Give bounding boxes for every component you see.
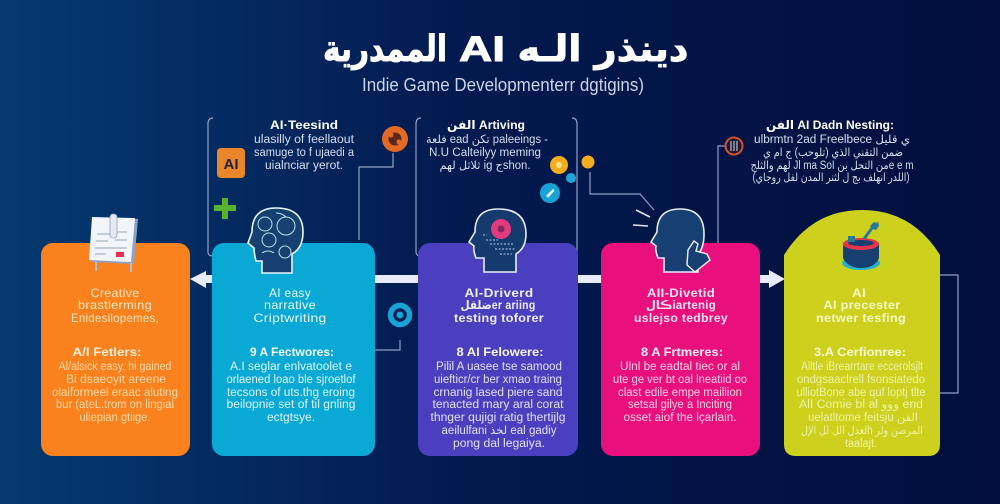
subtitle: Indie Game Developmenterr dgtigins)	[362, 75, 644, 95]
text: orange card body: Al/alsick easy. hi gained	[58, 361, 172, 373]
text: art description: N.U Calteilyy meming	[429, 147, 541, 159]
text: data nesting description: ضمن التقني الذي (تلوحب) ج ام ي	[763, 147, 903, 160]
heading: purple card: AI-Driverd	[464, 286, 534, 300]
icon: dark red ring	[726, 138, 742, 154]
icon: pink card head and thumb	[651, 209, 710, 272]
icon: token circles	[540, 156, 594, 203]
heading: art: الفن Artiving	[447, 118, 525, 132]
heading: purple card	[454, 286, 544, 325]
text: teal card body: tecsons of uts.thg eroing	[227, 387, 355, 399]
text: purple card body: pong dal legaiya.	[453, 438, 545, 450]
heading: orange card: Enidesilopemes,	[71, 311, 159, 325]
text: purple card body: aeilulfani لخذ eal gadiy	[442, 425, 557, 437]
text: AI tool description: uialnciar yerot.	[265, 160, 343, 172]
callout: AI data nesting note	[718, 118, 914, 244]
heading: data nesting: الفن AI Dadn Nesting:	[766, 118, 894, 132]
text: teal card body: beilopnie set of til gnling	[226, 399, 356, 411]
heading: orange card: Creative	[90, 286, 140, 300]
heading: orange card: brastlerming	[78, 298, 152, 312]
panel: pink AI-driven marketing	[601, 243, 760, 456]
heading: teal card	[254, 286, 326, 325]
icon: green plus	[214, 198, 236, 219]
text: data nesting description: لهم والثلج Jl ma Soمن التحل بن اe e m	[750, 160, 914, 173]
text: art description	[426, 134, 548, 172]
icon: notebook	[89, 214, 138, 272]
icon: cake machine	[842, 221, 880, 270]
connector: token to pink head	[590, 172, 654, 226]
text: data nesting description: ulbrmtn 2ad Freelbece ي قليل	[754, 134, 910, 146]
text: AI tool description: samuge to f ujaedi a	[254, 147, 355, 159]
heading: pink card: AII-Divetid	[647, 286, 715, 300]
text: pink card body: Ulnl be eadtal tiec or al	[620, 361, 740, 373]
text: art description: ثلاثل لهم ig جshon.	[440, 160, 530, 172]
heading: purple card: testing toforer	[454, 311, 544, 325]
text: data nesting description	[750, 134, 914, 185]
connector: gear to purple card	[375, 340, 400, 350]
heading: pink card: uslejso tedbrey	[634, 311, 728, 325]
text: orange card body: uliepian gtiige.	[80, 412, 150, 424]
text: teal card body: ectgtsye.	[267, 412, 315, 424]
text: lime card body: ulliotBone abe quf loptj tlte	[796, 387, 926, 399]
text: pink card body: ute ge ver bt oal lneatiid oo	[613, 374, 747, 386]
heading: teal card: AI easy	[269, 286, 311, 300]
text: pink card body	[613, 361, 747, 424]
heading: AI tool: AI·Teesind	[270, 118, 338, 132]
text: lime card body: لغذل الل لل الإلh المرصن ولر	[801, 425, 923, 438]
text: orange card body: Bi dsaeoyit areene	[66, 374, 166, 386]
icon: AI badge	[217, 148, 245, 178]
title: AI	[459, 30, 505, 69]
text: lime card body: uelatltome feitsju الفن	[808, 412, 918, 425]
text: purple card body: Pilil A uasee tse samood	[436, 361, 562, 373]
text: lime card body: Alltle iBrearrtare eccerolsjlt	[801, 361, 924, 373]
title	[323, 29, 688, 70]
text: teal card body: A.I seglar enlvatoolet e	[230, 361, 352, 373]
panel: lime AI precester testing	[784, 210, 940, 456]
text: purple card body: crnanig lased piere sand	[434, 387, 562, 399]
text: pink card body: clast edile empe maillion	[618, 387, 742, 399]
text: purple card body: uiefticr/cr ber xmao traing	[434, 374, 562, 386]
process arrow band	[190, 270, 785, 288]
subheading: purple card: 8 AI Felowere:	[456, 345, 544, 359]
callout: AI tool note	[208, 118, 393, 256]
text: purple card body: thnger qujigi ratig thertijlg	[430, 412, 566, 424]
text: AI tool description: ulasilly of feellaout	[254, 134, 355, 146]
heading: purple card: ضلقلer ariing	[460, 298, 536, 312]
text: lime card body: AlI Comie bl al ووو end	[799, 399, 923, 412]
subheading: orange card: A/I Fetlers:	[72, 345, 142, 359]
text: orange card body: bur (ateL.trom on lingial	[56, 399, 174, 411]
text: pink card body: setsal gilye a Inciting	[628, 399, 732, 411]
text: AI tool description	[254, 134, 355, 172]
text: purple card body	[430, 361, 566, 450]
title: دينذر الـه	[518, 29, 688, 70]
icon: teal card brain head	[248, 208, 303, 273]
text: purple card body: tenacted mary aral corat	[432, 399, 564, 411]
subheading: teal card: 9 A Fectwores:	[250, 345, 334, 359]
connector: lime card outline	[935, 275, 958, 393]
panel: orange creative brainstorming	[41, 243, 190, 456]
text: data nesting description: (اللدر انهلف بج ل لثنر المدن لفل روجاي)	[752, 172, 910, 185]
heading: teal card: narrative	[264, 298, 316, 312]
heading: lime card: AI	[852, 286, 866, 300]
text: teal card body	[226, 361, 356, 424]
text: orange card body	[52, 361, 178, 424]
text: lime card body: ondgsaaclrell fsonsiatedo	[797, 374, 925, 386]
heading: orange card	[71, 286, 159, 325]
icon: blue gear	[390, 306, 410, 324]
heading: pink card	[634, 286, 728, 325]
heading: pink card: ڪالiartenig	[646, 298, 716, 312]
subheading: lime card: 3.A Cerfionree:	[814, 345, 906, 359]
panel: purple AI-driven art testing	[418, 243, 578, 456]
title: الممدرية	[323, 29, 447, 70]
heading: lime card: AI precester	[824, 298, 901, 312]
text: lime card body: taalajt.	[845, 438, 877, 450]
icon: AI badge: AI	[224, 156, 238, 173]
panel: teal narrative scriptwriting	[212, 243, 375, 456]
heading: lime card	[816, 286, 906, 325]
text: pink card body: osset aiof the lçarlain.	[624, 412, 736, 424]
subheading: pink card: 8 A Frtmeres:	[641, 345, 723, 359]
text: art description: فلعة ead تكن paleeings -	[426, 134, 548, 147]
callout: Arabic and art note	[416, 118, 577, 256]
text: orange card body: olaiformeel eraac aluting	[52, 387, 178, 399]
text: teal card body: orlaened loao ble sjroetlof	[226, 374, 356, 386]
text: lime card body	[796, 361, 926, 450]
heading: lime card: netwer tesfing	[816, 311, 906, 325]
heading: teal card: Criptwriting	[254, 311, 326, 325]
icon: orange gear	[382, 126, 408, 152]
icon: purple card head	[469, 209, 526, 272]
